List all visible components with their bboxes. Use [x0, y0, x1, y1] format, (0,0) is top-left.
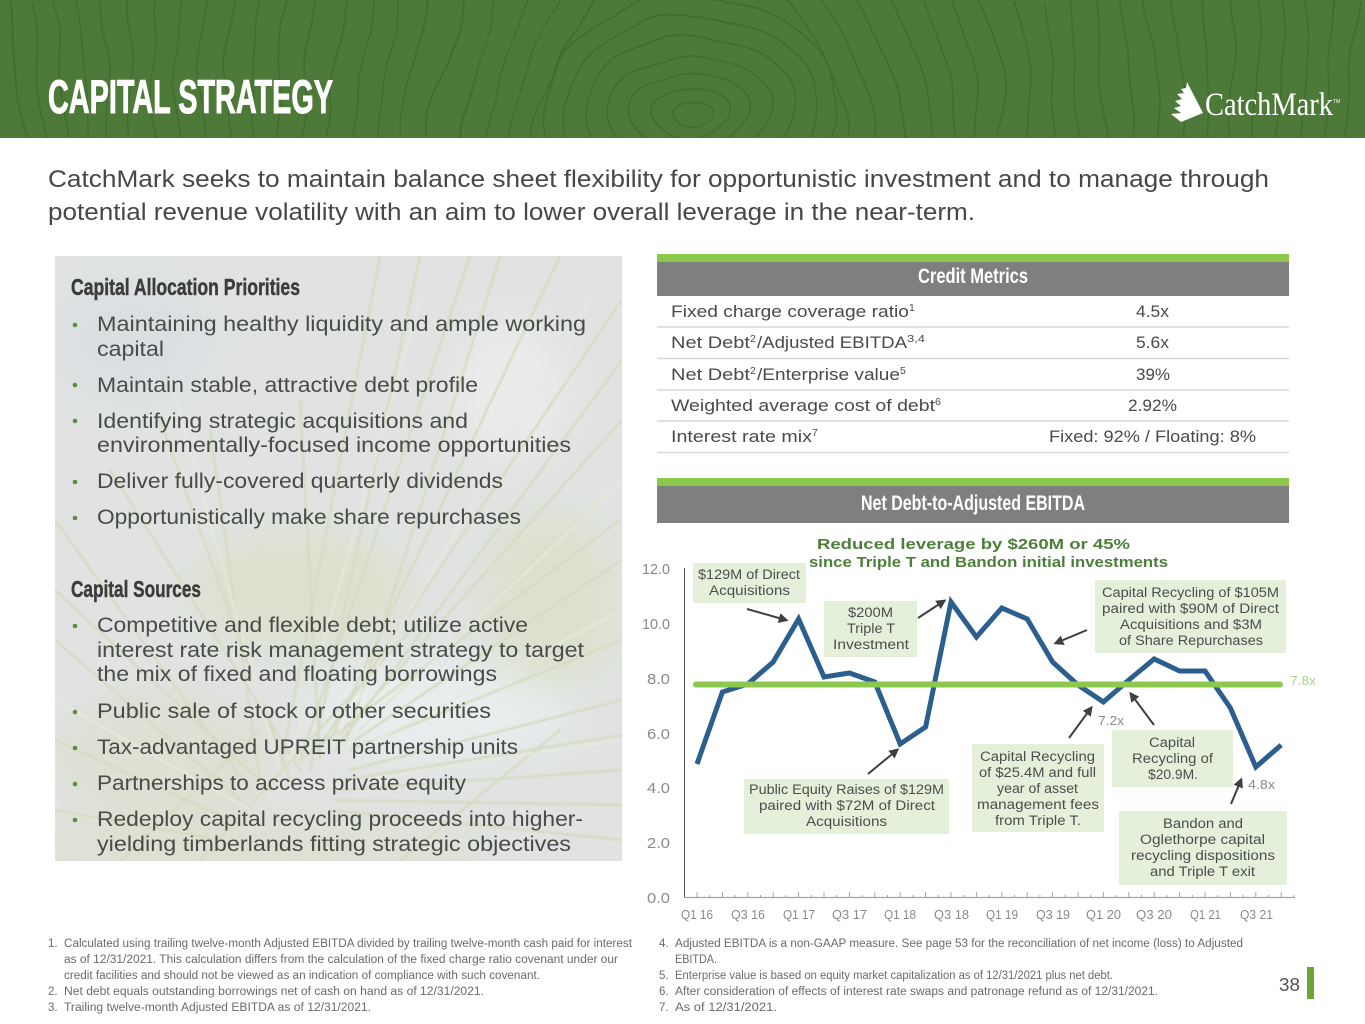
row: weighted average cost of debt: Weighted average cost of debt	[671, 396, 935, 415]
row: interest rate mix: Fixed: 92% / Floating: 8%	[1049, 427, 1256, 446]
footnotes: left column: 2.	[48, 986, 58, 998]
row: weighted average cost of debt	[671, 396, 1177, 415]
y axis labels: 0.0	[647, 890, 670, 907]
callout: Triple T investment: $200M	[848, 605, 893, 620]
list: allocation priorities: Deliver fully-covered quarterly dividends	[97, 470, 503, 493]
callout: capital recycling $20.9M: Capital	[1149, 735, 1195, 750]
callout: capital recycling $25.4M: from Triple T.	[995, 813, 1081, 828]
logo: CatchMark	[1171, 82, 1340, 123]
row: net debt to enterprise value: /Enterprise value	[757, 365, 900, 384]
x axis labels: Q1 18	[884, 907, 916, 922]
callout: public equity raises	[744, 779, 949, 834]
callout: capital recycling $105M: Capital Recycling of $105M	[1102, 585, 1279, 600]
callout: capital recycling $105M: of Share Repurchases	[1119, 633, 1263, 648]
table header: credit metrics: Credit Metrics	[918, 265, 1028, 288]
row: net debt to enterprise value: Net Debt	[671, 365, 750, 384]
callout: capital recycling $25.4M: management fees	[977, 797, 1099, 812]
row: net debt to enterprise value: 2	[750, 365, 756, 377]
callout: capital recycling $105M: paired with $90M of Direct	[1102, 601, 1279, 616]
intro text	[48, 166, 1269, 226]
footnotes: right column: 5.	[659, 970, 669, 982]
callout: direct acquisitions: Acquisitions	[709, 583, 790, 598]
row: net debt to enterprise value: 39%	[1136, 365, 1170, 384]
x axis labels: Q3 16	[731, 907, 765, 922]
intro text: potential revenue volatility with an aim to lower overall leverage in the near-term.	[48, 199, 975, 226]
x axis labels: Q3 18	[934, 907, 969, 922]
footnotes: left column: credit facilities and should not be viewed as an indication of compliance with such covenant.	[64, 970, 540, 982]
footnotes: right column: Enterprise value is based on equity market capitalization as of 12/31/2021 plus net debt.	[675, 970, 1113, 982]
row: fixed charge coverage ratio: 1	[909, 302, 915, 314]
value label: 7.2x: 7.2x	[1098, 713, 1125, 728]
row: net debt to adjusted EBITDA: 5.6x	[1136, 333, 1170, 352]
callout: public equity raises: Public Equity Raises of $129M	[749, 782, 944, 797]
list: allocation priorities	[73, 313, 586, 529]
heading: capital allocation priorities: Capital Allocation Priorities	[71, 274, 300, 300]
y axis labels: 2.0	[647, 835, 670, 852]
callout: Bandon and Oglethorpe	[1119, 811, 1287, 885]
callout: Triple T investment	[824, 601, 917, 657]
page number	[1279, 967, 1314, 999]
list: capital sources	[73, 614, 584, 856]
callout: capital recycling $105M: Acquisitions and $3M	[1120, 617, 1262, 632]
data line: leverage	[697, 602, 1281, 767]
x axis labels: Q1 19	[986, 907, 1018, 922]
callout: public equity raises: paired with $72M of Direct	[759, 798, 935, 813]
callout: direct acquisitions: $129M of Direct	[698, 567, 800, 582]
title: CAPITAL STRATEGY	[48, 70, 333, 123]
x axis labels: Q1 20	[1086, 907, 1121, 922]
callout: capital recycling $20.9M: Recycling of	[1132, 751, 1213, 766]
header banner	[0, 0, 1365, 138]
intro text: CatchMark seeks to maintain balance sheet flexibility for opportunistic investment and to manage through	[48, 166, 1269, 193]
callout: capital recycling $25.4M: Capital Recycling	[980, 749, 1095, 764]
panel: capital allocation and sources	[55, 256, 622, 861]
list: allocation priorities: Opportunistically make share repurchases	[97, 506, 521, 529]
footnotes: left column	[48, 938, 633, 1014]
list: capital sources: yielding timberlands fitting strategic objectives	[97, 833, 571, 856]
footnotes: right column: 6.	[659, 986, 669, 998]
value label: 7.8x: 7.8x	[1290, 673, 1317, 688]
list: capital sources: Public sale of stock or other securities	[97, 700, 491, 723]
list: allocation priorities: Maintaining healthy liquidity and ample working	[97, 313, 586, 336]
footnotes: right column: 7.	[659, 1002, 669, 1014]
row: net debt to enterprise value: 5	[900, 365, 906, 377]
callout: capital recycling $25.4M: year of asset	[997, 781, 1078, 796]
row: net debt to adjusted EBITDA: /Adjusted EBITDA	[757, 333, 908, 352]
y axis labels: 4.0	[647, 780, 670, 797]
logo: CatchMark: CatchMark	[1205, 87, 1333, 123]
page number: 38	[1279, 975, 1300, 995]
callout: Bandon and Oglethorpe: Bandon and	[1163, 816, 1243, 831]
y axis labels: 6.0	[647, 726, 670, 743]
logo: CatchMark: TM	[1333, 99, 1340, 105]
y axis labels: 8.0	[647, 671, 670, 688]
callout: capital recycling $20.9M: $20.9M.	[1148, 767, 1198, 782]
x axis labels: Q1 21	[1190, 907, 1221, 922]
footnotes: left column: Trailing twelve-month Adjusted EBITDA as of 12/31/2021.	[64, 1002, 371, 1014]
heading: capital sources: Capital Sources	[71, 576, 201, 602]
panel: credit metrics table	[657, 254, 1289, 452]
chart heading	[809, 536, 1168, 571]
callout: Bandon and Oglethorpe: recycling dispositions	[1131, 848, 1275, 863]
x axis labels: Q3 19	[1036, 907, 1070, 922]
footnotes: right column: Adjusted EBITDA is a non-GAAP measure. See page 53 for the reconciliation of net income (loss) to Adjusted	[675, 938, 1243, 950]
callout: capital recycling $20.9M	[1112, 730, 1233, 787]
list: capital sources: Partnerships to access private equity	[97, 772, 467, 795]
footnotes: right column: After consideration of effects of interest rate swaps and patronage refund as of 12/31/2021.	[675, 986, 1158, 998]
chart heading: Reduced leverage by $260M or 45%	[817, 536, 1130, 553]
row: fixed charge coverage ratio	[671, 302, 1170, 321]
callout: Bandon and Oglethorpe: and Triple T exit	[1150, 864, 1255, 879]
row: fixed charge coverage ratio: 4.5x	[1136, 302, 1170, 321]
panel background: pine needles	[55, 256, 622, 861]
list: allocation priorities: Maintain stable, attractive debt profile	[97, 374, 478, 397]
footnotes: left column: 1.	[48, 938, 58, 950]
x axis labels: Q1 16	[681, 907, 713, 922]
row: weighted average cost of debt: 2.92%	[1128, 396, 1177, 415]
callout: capital recycling $25.4M	[972, 744, 1104, 832]
list: allocation priorities: Identifying strategic acquisitions and	[97, 410, 468, 433]
footnotes: right column: As of 12/31/2021.	[675, 1002, 777, 1014]
list: allocation priorities: capital	[97, 338, 164, 361]
y axis labels	[642, 561, 670, 907]
callout: Triple T investment: Triple T	[847, 621, 895, 636]
callout: Bandon and Oglethorpe: Oglethorpe capital	[1140, 832, 1265, 847]
callout: direct acquisitions	[693, 563, 806, 603]
list: capital sources: Redeploy capital recycling proceeds into higher-	[97, 808, 583, 831]
average line: 7.8x	[696, 682, 1280, 688]
callout: capital recycling $25.4M: of $25.4M and full	[979, 765, 1096, 780]
footnotes: left column: Net debt equals outstanding borrowings net of cash on hand as of 12/31/2021.	[64, 986, 484, 998]
list: capital sources: Tax-advantaged UPREIT partnership units	[97, 736, 518, 759]
y axis labels: 10.0	[642, 616, 670, 633]
row: interest rate mix: Interest rate mix	[671, 427, 813, 446]
footnotes: right column	[659, 938, 1243, 1014]
callout: public equity raises: Acquisitions	[806, 814, 887, 829]
value label: 4.8x: 4.8x	[1248, 777, 1276, 792]
row: net debt to adjusted EBITDA: 2	[750, 333, 756, 345]
chart heading: since Triple T and Bandon initial investments	[809, 554, 1168, 571]
x axis labels	[681, 907, 1273, 922]
footnotes: left column: 3.	[48, 1002, 58, 1014]
row: weighted average cost of debt: 6	[935, 396, 941, 408]
x axis labels: Q3 20	[1136, 907, 1172, 922]
footnotes: right column: 4.	[659, 938, 669, 950]
table header: credit metrics	[657, 254, 1289, 296]
list: allocation priorities: environmentally-focused income opportunities	[97, 434, 571, 457]
x axis labels: Q3 17	[832, 907, 867, 922]
x axis labels: Q1 17	[783, 907, 815, 922]
footnotes: left column: as of 12/31/2021. This calculation differs from the calculation of the fixed charge ratio covenant under our	[64, 954, 618, 966]
section header: net debt to adjusted EBITDA: Net Debt-to-Adjusted EBITDA	[861, 492, 1085, 515]
row: net debt to enterprise value	[671, 365, 1170, 384]
footnotes: left column: Calculated using trailing twelve-month Adjusted EBITDA divided by trailing twelve-month cash paid for interest	[64, 938, 633, 950]
callout: Triple T investment: Investment	[833, 637, 909, 652]
list: capital sources: Competitive and flexible debt; utilize active	[97, 614, 528, 637]
list: capital sources: interest rate risk management strategy to target	[97, 639, 584, 662]
arrows: callout pointers	[747, 601, 1241, 804]
x axis labels: Q3 21	[1240, 907, 1273, 922]
footnotes: right column: EBITDA.	[675, 954, 717, 966]
callout: capital recycling $105M	[1095, 580, 1286, 653]
row: fixed charge coverage ratio: Fixed charge coverage ratio	[671, 302, 909, 321]
y axis labels: 12.0	[642, 561, 670, 578]
row: net debt to adjusted EBITDA	[671, 333, 1170, 352]
section header: net debt to adjusted EBITDA	[657, 478, 1289, 523]
row: net debt to adjusted EBITDA: Net Debt	[671, 333, 750, 352]
list: capital sources: the mix of fixed and floating borrowings	[97, 663, 497, 686]
row: interest rate mix	[671, 427, 1256, 446]
row: net debt to adjusted EBITDA: 3,4	[907, 333, 925, 345]
row: interest rate mix: 7	[812, 427, 818, 439]
line chart: net debt to adjusted EBITDA	[642, 561, 1317, 922]
